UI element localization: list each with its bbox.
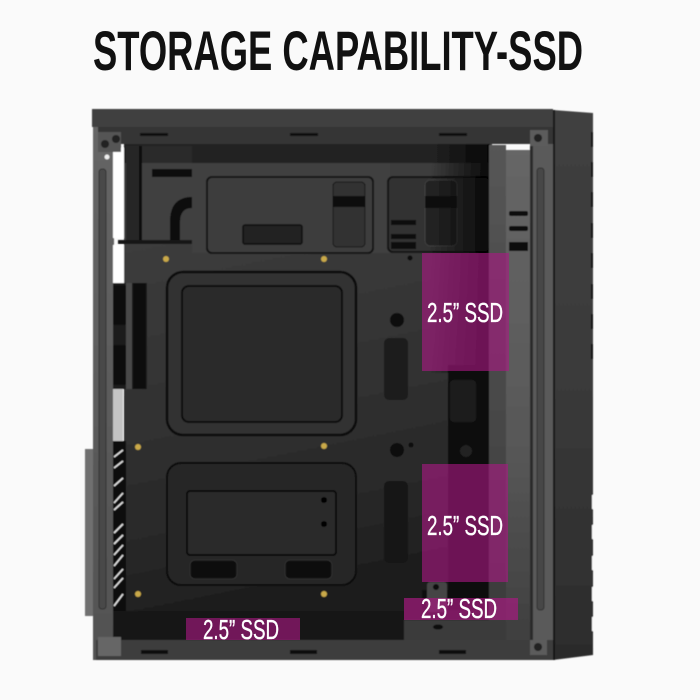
floor shadow bbox=[113, 611, 404, 642]
upper raised plate bbox=[192, 163, 390, 253]
vertical slots bbox=[384, 256, 414, 563]
left protruding expansion bracket bbox=[85, 449, 94, 616]
dark upper band bbox=[124, 143, 490, 163]
top bar bbox=[92, 109, 553, 152]
right vertical column bbox=[489, 145, 532, 642]
computer case bbox=[85, 109, 594, 660]
dark shade at right of panel bbox=[430, 143, 490, 373]
brass standoffs bbox=[135, 256, 327, 597]
left rail bbox=[93, 127, 114, 660]
SSD mount highlight: case floor: 2.5” SSD bbox=[203, 614, 279, 645]
SSD mount highlight: middle: 2.5” SSD bbox=[427, 510, 503, 541]
white opening bbox=[113, 148, 126, 443]
right side panel bbox=[553, 110, 594, 660]
dark drive bay opening bbox=[422, 365, 490, 610]
cutout bbox=[243, 225, 302, 244]
bottom bar bbox=[96, 637, 553, 660]
motherboard large recess bbox=[167, 272, 356, 435]
SSD mount highlight: upper bbox=[422, 253, 509, 371]
lower drive tray bbox=[404, 582, 524, 642]
upper right vent box bbox=[388, 177, 490, 252]
fan area bbox=[113, 283, 147, 389]
SSD mount highlight: upper: 2.5” SSD bbox=[427, 297, 503, 328]
top-left compartment bbox=[118, 146, 192, 244]
back panel bbox=[124, 143, 492, 643]
SSD mount highlight: drive tray: 2.5” SSD bbox=[421, 593, 497, 624]
hatched vents bbox=[113, 441, 126, 611]
right rail bbox=[530, 128, 553, 643]
upper slot bbox=[333, 182, 365, 247]
SSD mount highlight: middle bbox=[422, 464, 508, 582]
motherboard lower recess bbox=[167, 463, 356, 585]
